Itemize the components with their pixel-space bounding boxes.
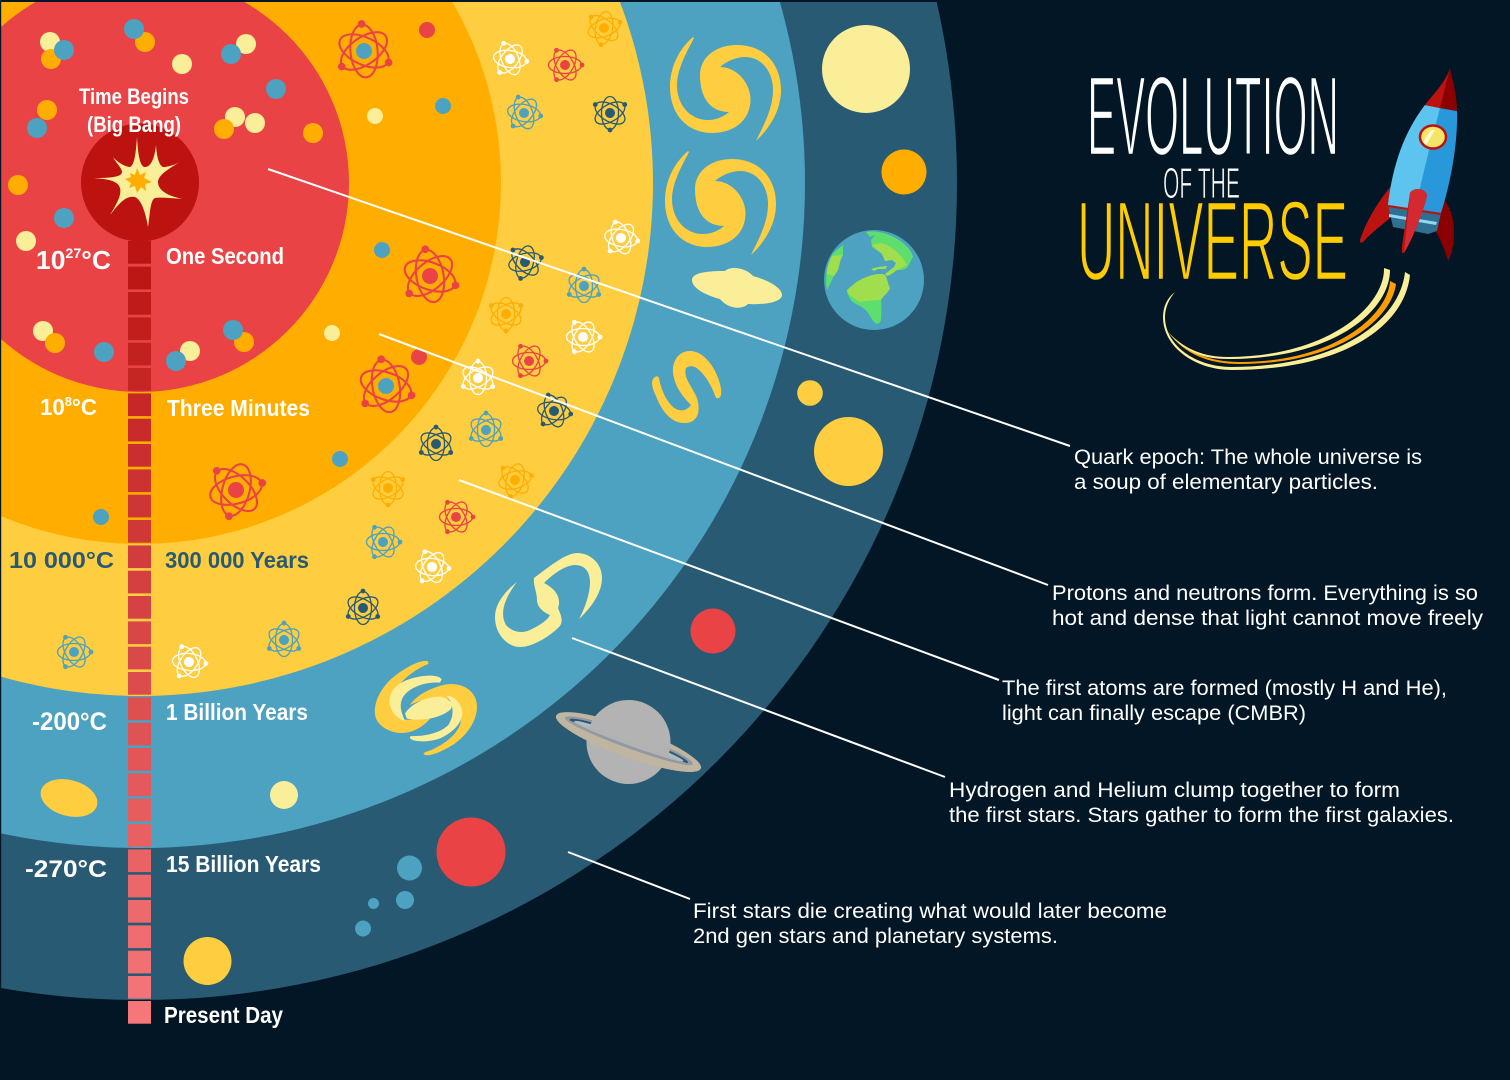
icon: spiral galaxy [670, 37, 781, 141]
icon: atom [582, 4, 629, 51]
label: time begins: (Big Bang) [87, 112, 181, 137]
icon: atom [364, 462, 414, 512]
label: temperature -200: -200°C [32, 708, 107, 736]
icon: small planets [355, 856, 422, 936]
label: temperature -270: -270°C [25, 856, 107, 883]
icon: atom [339, 584, 389, 634]
ring: protons and neutrons [0, 0, 501, 544]
icon: atom [440, 498, 475, 536]
text: quark epoch [1074, 446, 1422, 494]
ring: stars and planets [0, 0, 957, 1000]
icon: red star [690, 608, 736, 654]
icon: atom [512, 342, 548, 380]
label: temperature 10^27: 10 [36, 245, 65, 275]
label: three minutes: Three Minutes [167, 395, 310, 421]
icon: atom [454, 354, 504, 404]
label: time begins [79, 84, 189, 137]
text: first atoms [1002, 677, 1447, 725]
icon: oval galaxy [36, 773, 102, 823]
text: protons and neutrons [1052, 582, 1484, 630]
icon: big bang [81, 124, 199, 242]
panel: stage rings [0, 0, 957, 1000]
icon: atom [351, 349, 425, 424]
particles in quark epoch [8, 19, 323, 371]
icon: atom [171, 642, 210, 682]
text: protons and neutrons: hot and dense that light cannot move freely [1052, 607, 1484, 630]
icon: atom [58, 633, 93, 671]
label: time begins: Time Begins [79, 84, 189, 109]
particles in proton ring [93, 22, 451, 525]
icon: atom [548, 46, 584, 84]
icon: atom [412, 420, 462, 470]
label: temperature 10^27: °C [81, 245, 111, 275]
icon: spiral galaxy [665, 151, 776, 255]
icon: atom [414, 547, 453, 587]
icon: large yellow star [814, 417, 883, 486]
icon: atom [482, 288, 532, 338]
icon: atom [260, 616, 310, 666]
label: temperature 10^8: °C [72, 394, 97, 420]
icon: saturn [551, 700, 706, 784]
icon: small spiral galaxy [652, 351, 721, 423]
text: second generation stars [693, 900, 1167, 948]
icon: atom [494, 457, 539, 502]
icon: atom [328, 13, 405, 91]
icon: two-tone spiral galaxy [375, 661, 477, 755]
callout lines [268, 169, 1070, 899]
icon: atom [586, 87, 636, 137]
icon: atom [602, 217, 643, 260]
icon: atom [366, 523, 402, 561]
label: 300 000 years: 300 000 Years [165, 547, 309, 573]
text: second generation stars: 2nd gen stars and planetary systems. [693, 925, 1058, 948]
icon: atom [395, 239, 469, 314]
ring: quark epoch [0, 0, 349, 392]
text: first stars: Hydrogen and Helium clump together to form [949, 779, 1400, 802]
text: second generation stars: First stars die creating what would later become [693, 900, 1167, 923]
thermometer timeline [128, 241, 151, 1024]
text: first stars [949, 779, 1454, 827]
label: one second: One Second [166, 243, 284, 269]
icon: rocket [1360, 68, 1457, 261]
icon: atom [504, 239, 549, 284]
ring: first stars and galaxies [0, 0, 805, 848]
icon: atom [535, 390, 576, 433]
icon: atom [462, 406, 512, 456]
ring: first atoms [0, 0, 653, 696]
icon: atom [203, 453, 274, 525]
icon: red planet [436, 818, 506, 886]
label: temperature 10^8: 10 [40, 394, 66, 420]
icon: atom [505, 92, 546, 135]
icon: rocket exhaust trails [1163, 268, 1410, 370]
label: temperature 10^8: 8 [65, 394, 72, 409]
title [1077, 53, 1348, 304]
icon: orange star [882, 150, 926, 194]
label: present day: Present Day [164, 1002, 283, 1028]
text: first stars: the first stars. Stars gather to form the first galaxies. [949, 804, 1454, 827]
title: OF THE [1163, 159, 1240, 208]
icon: atom [560, 262, 610, 312]
text: first atoms: light can finally escape (CMBR) [1002, 702, 1306, 725]
icon: atom [491, 38, 532, 80]
label: 1 billion years: 1 Billion Years [166, 699, 308, 725]
text: quark epoch: a soup of elementary particles. [1074, 471, 1378, 494]
icon: earth [824, 230, 924, 330]
icon: small yellow star [797, 380, 823, 406]
text: first atoms: The first atoms are formed (mostly H and He), [1002, 677, 1447, 700]
label: temperature 10^27: 27 [65, 245, 82, 261]
label: 15 billion years: 15 Billion Years [166, 851, 321, 877]
icon: cream star [270, 781, 298, 809]
icon: yellow planet [184, 937, 232, 985]
label: temperature 10 000: 10 000°C [9, 547, 114, 573]
icon: elliptical galaxy [692, 268, 782, 308]
text: quark epoch: Quark epoch: The whole universe is [1074, 446, 1422, 469]
text: protons and neutrons: Protons and neutrons form. Everything is so [1052, 582, 1478, 605]
icon: cream spiral galaxy [495, 553, 602, 647]
icon: atom [566, 318, 602, 356]
icon: cream sun [822, 25, 910, 113]
